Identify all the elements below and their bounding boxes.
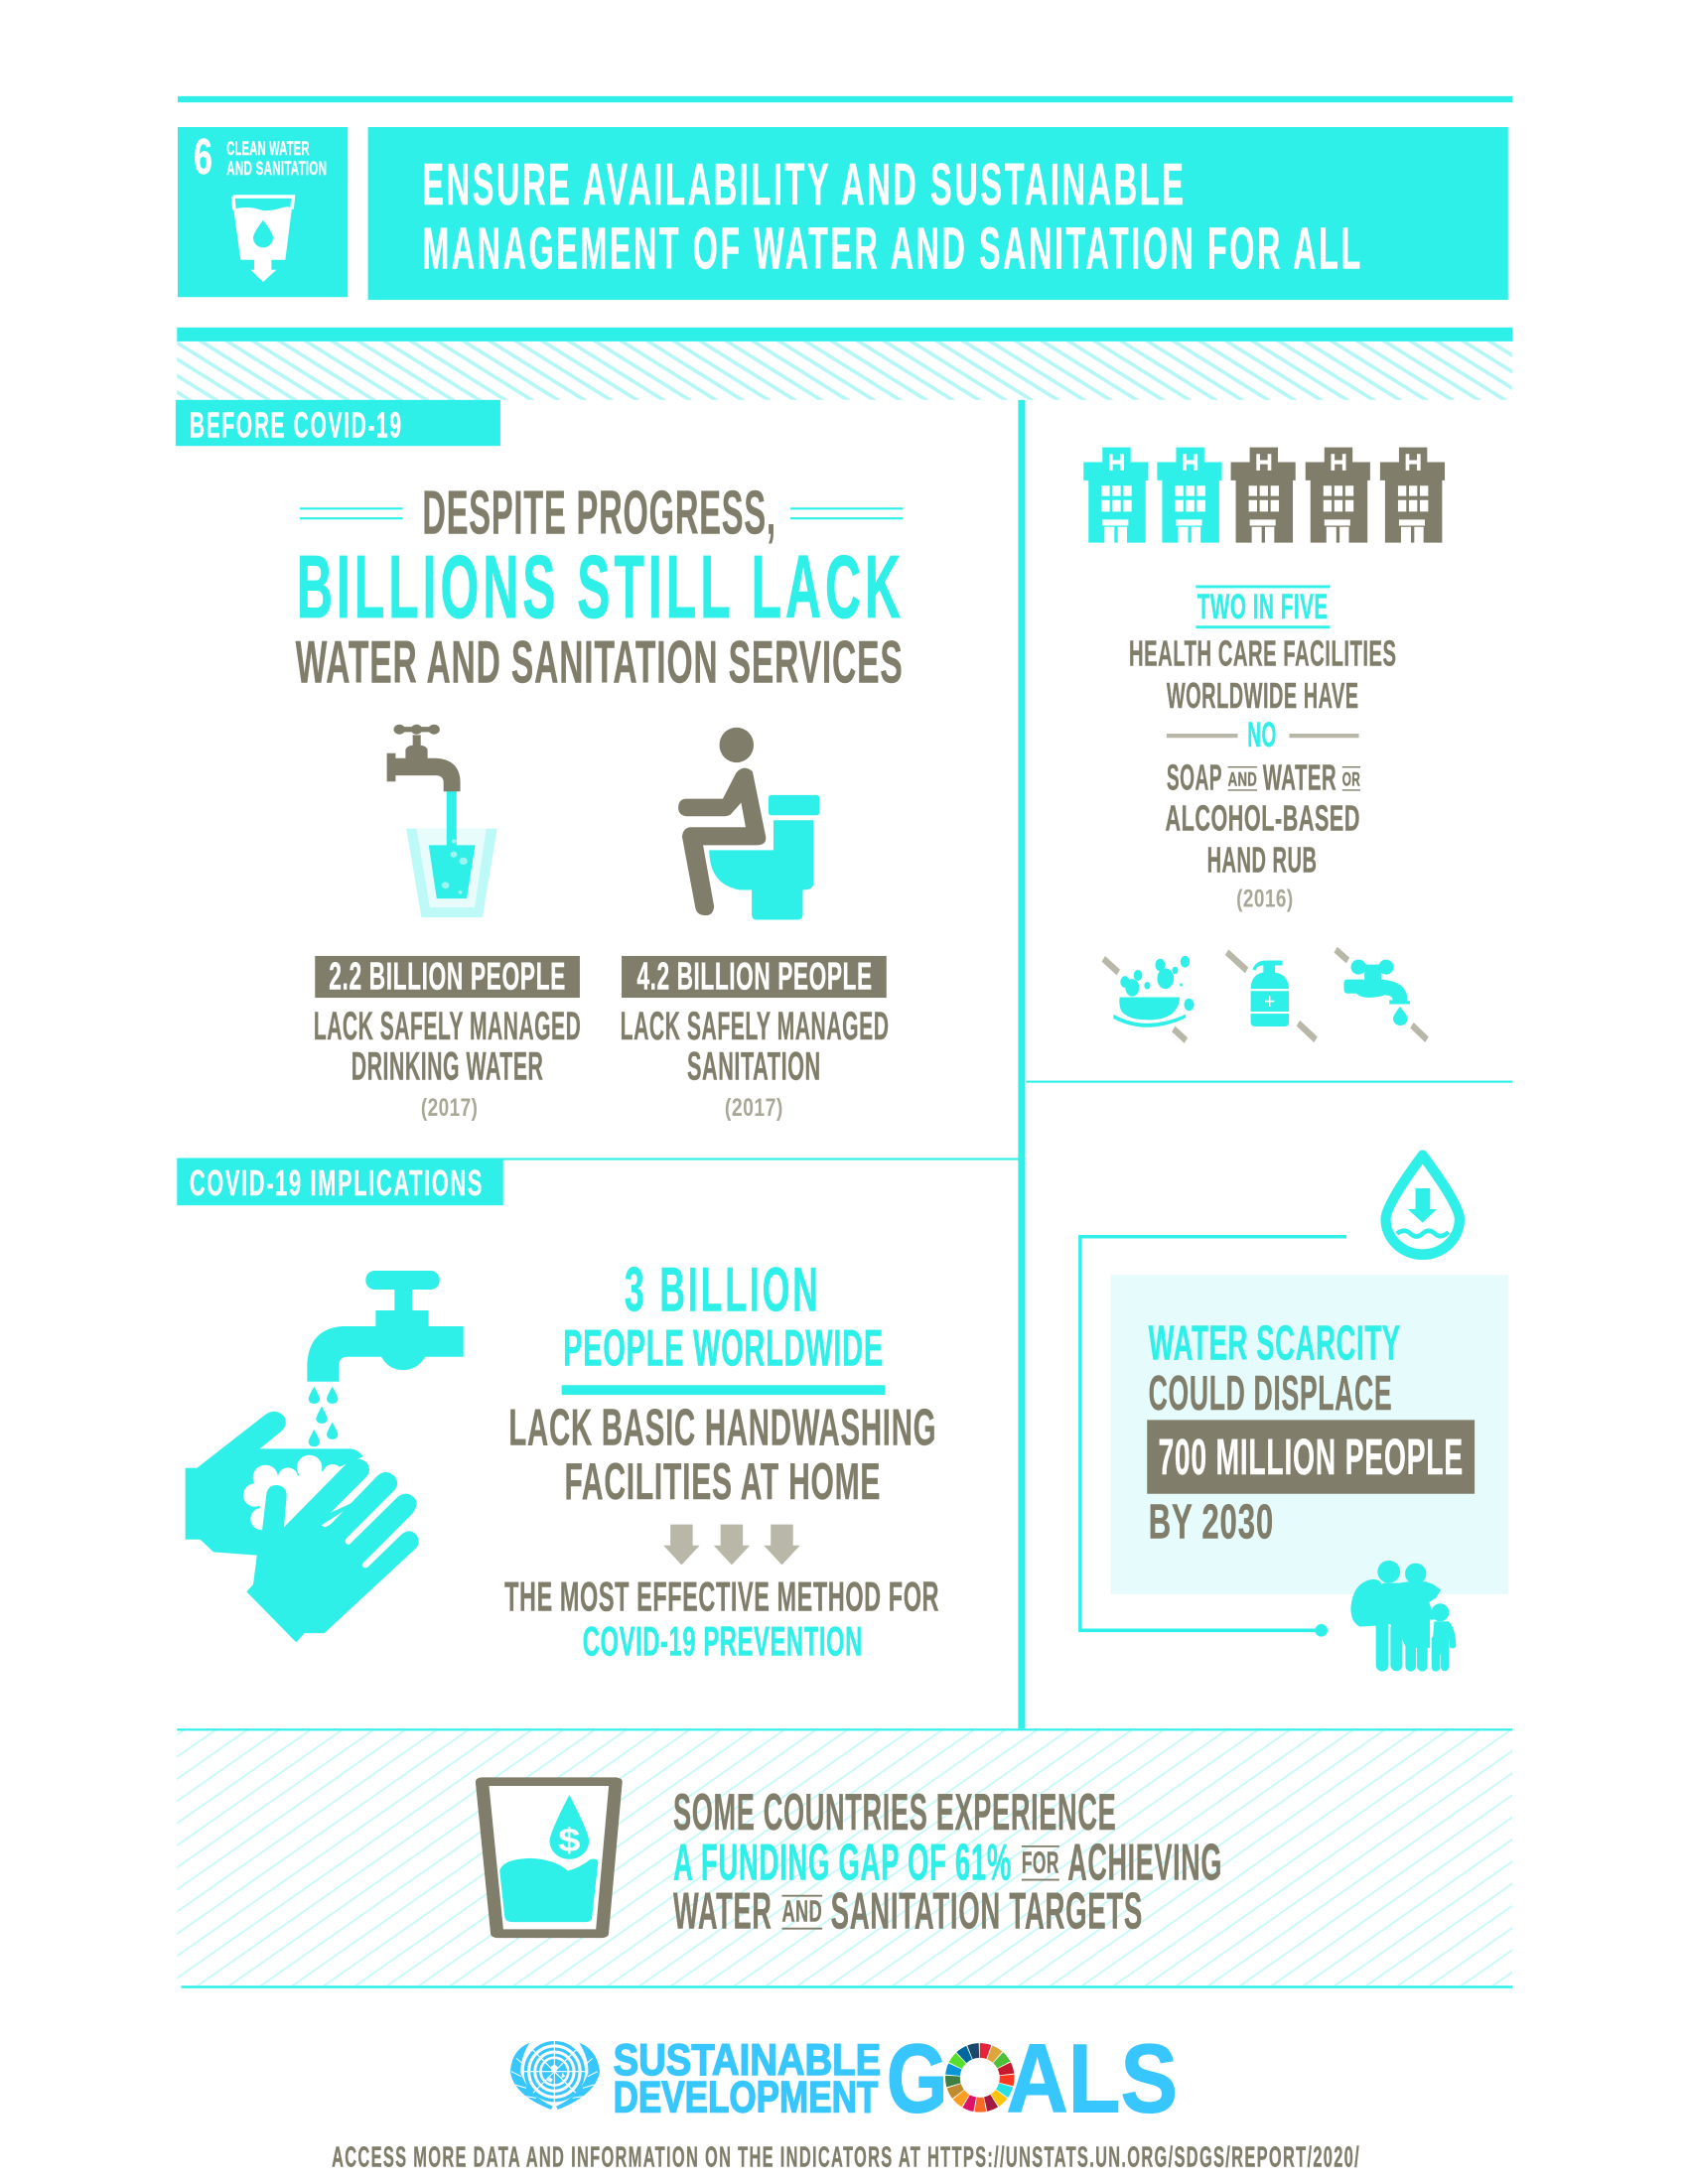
text: soap and water or alcohol-based hand rub <box>1165 757 1360 880</box>
icon: washing hands under tap <box>186 1271 464 1642</box>
title banner <box>368 127 1508 300</box>
wordmark: sustainable development <box>614 2034 881 2122</box>
icon: glass with dollar drop: $ <box>558 1822 581 1859</box>
text: by 2030: BY 2030 <box>1149 1495 1274 1549</box>
text: lack safely managed sanitation <box>621 1005 890 1089</box>
text: funding gap statement: A FUNDING GAP OF 61% <box>673 1834 1012 1891</box>
text: 3 billion people worldwide: PEOPLE WORLDWIDE <box>563 1319 884 1377</box>
text: no: NO <box>1247 716 1277 754</box>
section tag: covid-19 implications <box>177 1160 503 1205</box>
wordmark: goals: G <box>887 2024 948 2133</box>
heading: despite progress <box>300 478 904 547</box>
text: funding gap statement: SANITATION TARGETS <box>831 1882 1143 1940</box>
panel: health care facilities <box>1083 448 1445 1040</box>
goal 6 badge <box>178 127 348 297</box>
text: soap and water or alcohol-based hand rub: HAND RUB <box>1207 839 1317 880</box>
section tag: covid-19 implications: COVID-19 IMPLICATIONS <box>190 1162 484 1203</box>
icon: three down arrows <box>663 1525 800 1565</box>
text: funding gap statement: ACHIEVING <box>1067 1834 1222 1891</box>
text: funding gap statement <box>673 1784 1222 1940</box>
panel: before covid-19 <box>176 400 905 1122</box>
text: health care facilities worldwide have: WORLDWIDE HAVE <box>1167 675 1359 716</box>
year: (2017) <box>421 1094 478 1122</box>
wordmark: sustainable development: DEVELOPMENT <box>614 2072 878 2122</box>
text: lack safely managed drinking water: LACK SAFELY MANAGED <box>314 1005 581 1048</box>
column divider <box>1018 400 1025 1728</box>
year: (2016) <box>1236 886 1294 913</box>
wordmark: goals: ALS <box>1006 2024 1178 2133</box>
icon: hand sanitizer crossed out <box>1227 952 1316 1039</box>
text: lack basic handwashing facilities at home: LACK BASIC HANDWASHING <box>508 1399 936 1456</box>
goal number: 6 <box>194 128 213 185</box>
text: health care facilities worldwide have: HEALTH CARE FACILITIES <box>1129 633 1396 674</box>
footer logo: sustainable development goals <box>510 2024 1178 2133</box>
text: water scarcity could displace: WATER SCARCITY <box>1149 1317 1401 1371</box>
goal name: CLEAN WATER <box>226 138 310 160</box>
tag: 700 million people <box>1147 1420 1475 1494</box>
goal name <box>226 138 327 180</box>
tag: 2.2 billion people <box>315 954 580 998</box>
callout background <box>1111 1275 1508 1594</box>
text: most effective method: COVID-19 PREVENTION <box>583 1617 863 1664</box>
icon: family <box>1350 1561 1456 1667</box>
text: soap and water or alcohol-based hand rub: ALCOHOL-BASED <box>1165 797 1360 838</box>
icon: sdg colour wheel <box>941 2039 1018 2116</box>
text: soap and water or alcohol-based hand rub: SOAP <box>1167 757 1222 798</box>
icon: soap crossed out <box>1103 956 1194 1040</box>
text: soap and water or alcohol-based hand rub: AND <box>1228 768 1257 790</box>
text: most effective method: THE MOST EFFECTIVE METHOD FOR <box>504 1572 939 1619</box>
text: lack safely managed sanitation: SANITATION <box>687 1045 821 1089</box>
title text <box>422 153 1363 282</box>
text: funding gap statement: FOR <box>1022 1844 1059 1879</box>
text: lack safely managed sanitation: LACK SAFELY MANAGED <box>621 1005 890 1048</box>
text: lack safely managed drinking water: DRINKING WATER <box>352 1045 543 1089</box>
year: (2017) <box>725 1094 783 1122</box>
tag: 700 million people: 700 MILLION PEOPLE <box>1158 1429 1464 1485</box>
callout: two in five: TWO IN FIVE <box>1197 588 1329 626</box>
stat: sanitation <box>621 954 890 1122</box>
heading: billions still lack: BILLIONS STILL LACK <box>297 538 905 637</box>
text: funding gap statement: AND <box>781 1893 822 1928</box>
icon: person on toilet <box>678 728 819 920</box>
panel: water scarcity <box>1080 1156 1508 1667</box>
text: most effective method <box>504 1572 939 1664</box>
text: water scarcity could displace: COULD DISPLACE <box>1149 1367 1392 1421</box>
text: lack safely managed drinking water <box>314 1005 581 1089</box>
text: 3 billion people worldwide: 3 BILLION <box>625 1256 821 1325</box>
heading: water and sanitation services: WATER AND SANITATION SERVICES <box>296 628 904 696</box>
heading: despite progress: DESPITE PROGRESS, <box>422 478 776 547</box>
text: funding gap statement: SOME COUNTRIES EXPERIENCE <box>673 1784 1116 1842</box>
icon: un emblem <box>510 2040 600 2110</box>
hatched background <box>177 1728 1512 1988</box>
wordmark: sustainable development: SUSTAINABLE <box>614 2034 881 2085</box>
top rule <box>178 96 1512 102</box>
section tag: before covid-19: BEFORE COVID-19 <box>190 404 403 445</box>
icon: tap crossed out <box>1336 950 1427 1039</box>
tag: 4.2 billion people <box>622 954 887 998</box>
hatched band <box>177 328 1512 400</box>
icon: glass with arrow <box>233 197 293 282</box>
stat: drinking water <box>314 954 581 1122</box>
icon: faucet filling glass <box>387 725 497 917</box>
callout: two in five <box>1196 587 1330 627</box>
text: soap and water or alcohol-based hand rub: WATER <box>1263 757 1336 798</box>
text: 3 billion people worldwide <box>562 1256 885 1395</box>
text: lack basic handwashing facilities at home: FACILITIES AT HOME <box>564 1453 881 1511</box>
panel: funding gap <box>177 1728 1512 1988</box>
tag: 2.2 billion people: 2.2 BILLION PEOPLE <box>329 954 566 998</box>
text: funding gap statement: WATER <box>673 1882 773 1940</box>
panel: covid-19 implications <box>177 1160 939 1664</box>
text: water scarcity could displace <box>1149 1317 1401 1421</box>
tag: 4.2 billion people: 4.2 BILLION PEOPLE <box>636 954 873 998</box>
icon: five hospitals, two highlighted <box>1083 448 1445 543</box>
text: health care facilities worldwide have <box>1129 633 1396 716</box>
text: soap and water or alcohol-based hand rub: OR <box>1342 768 1360 790</box>
icon: water drop with down arrow <box>1386 1156 1460 1255</box>
wordmark: goals <box>887 2024 1178 2133</box>
icon: glass with dollar drop <box>482 1782 616 1934</box>
connector line <box>1080 1237 1346 1637</box>
text: lack basic handwashing facilities at home <box>508 1399 936 1511</box>
goal name: AND SANITATION <box>226 158 327 180</box>
